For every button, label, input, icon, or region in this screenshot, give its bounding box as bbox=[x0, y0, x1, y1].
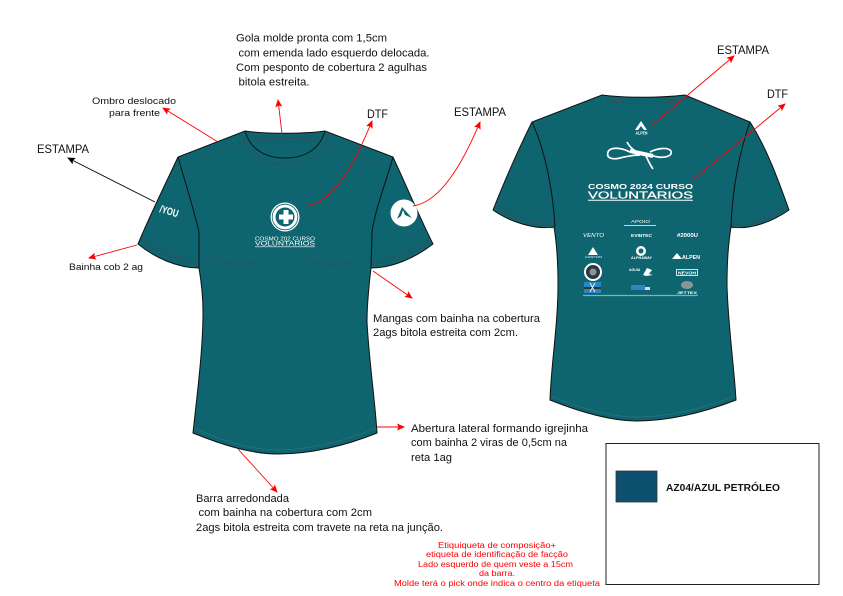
label: estampa left: ESTAMPA bbox=[37, 144, 89, 156]
back title: VOLUNTARIOS bbox=[588, 190, 693, 202]
label: gola: bitola estreita. bbox=[238, 76, 310, 88]
front t-shirt bbox=[138, 131, 433, 454]
label: DTF back: DTF bbox=[767, 89, 788, 101]
chest text: VOLUNTARIOS bbox=[255, 242, 315, 248]
label: barra: com bainha na cobertura com 2cm bbox=[198, 507, 372, 519]
red note: da barra. bbox=[479, 569, 515, 578]
label: estampa back: ESTAMPA bbox=[717, 45, 769, 57]
chest text bbox=[255, 236, 315, 248]
red note bbox=[394, 541, 601, 588]
red note: Lado esquerdo de quem veste a 15cm bbox=[418, 560, 573, 569]
back neck logo bbox=[635, 121, 648, 136]
label: gola: Gola molde pronta com 1,5cm bbox=[236, 32, 387, 44]
label: estampa sleeve: ESTAMPA bbox=[454, 107, 506, 119]
back neck logo: ALPEN bbox=[636, 130, 648, 136]
back seams bbox=[496, 100, 787, 417]
chest text: COSMO 202 CURSO bbox=[255, 236, 315, 242]
sponsors: APOIO bbox=[631, 219, 651, 224]
label: barra: 2ags bitola estreita com travete na reta na junção. bbox=[196, 522, 443, 534]
sponsors: JETTEX bbox=[677, 291, 698, 295]
sponsors bbox=[583, 219, 700, 296]
knot illustration bbox=[608, 142, 671, 169]
red note: Molde terá o pick onde indica o centro da etiqueta bbox=[394, 579, 601, 588]
colour legend box bbox=[606, 444, 819, 584]
label: abertura lateral: com bainha 2 viras de 0,5cm na bbox=[411, 437, 568, 449]
colour name: AZ04/AZUL PETRÓLEO bbox=[666, 481, 780, 494]
sponsors: NEVOH bbox=[678, 270, 696, 276]
sponsors: #2000U bbox=[677, 233, 698, 239]
back title: COSMO 2024 CURSO bbox=[588, 184, 694, 191]
sponsors: AGUIA bbox=[629, 268, 641, 272]
label: abertura lateral: Abertura lateral formando igrejinha bbox=[411, 423, 589, 435]
sponsors: ALPHAWAY bbox=[631, 256, 653, 260]
sponsors: VENTO bbox=[583, 233, 604, 239]
sponsors: ALPEN bbox=[682, 255, 700, 261]
annotation arrows bbox=[68, 56, 785, 492]
label: gola: Com pesponto de cobertura 2 agulhas bbox=[236, 62, 428, 74]
right sleeve patch bbox=[390, 200, 418, 226]
left sleeve print: /YOU bbox=[158, 203, 180, 220]
label: abertura lateral: reta 1ag bbox=[411, 452, 452, 464]
sponsors: EVINTEC bbox=[631, 233, 653, 238]
front seams bbox=[141, 131, 431, 450]
label: mangas: Mangas com bainha na cobertura bbox=[373, 313, 541, 325]
back title bbox=[588, 184, 694, 202]
label: barra: Barra arredondada bbox=[196, 493, 290, 505]
label: gola: com emenda lado esquerdo delocada. bbox=[238, 48, 430, 60]
back t-shirt bbox=[493, 95, 789, 421]
back shirt body bbox=[493, 95, 789, 421]
label: gola bbox=[236, 32, 430, 88]
sponsors: CANYON bbox=[585, 255, 602, 259]
label: ombro: Ombro deslocado bbox=[92, 96, 176, 106]
label: mangas: 2ags bitola estreita com 2cm. bbox=[373, 327, 518, 339]
label: abertura lateral bbox=[411, 423, 589, 464]
chest logo bbox=[270, 202, 300, 232]
label: barra bbox=[196, 493, 443, 534]
colour swatch bbox=[616, 471, 657, 502]
label: ombro: para frente bbox=[109, 108, 160, 118]
label: bainha: Bainha cob 2 ag bbox=[69, 262, 143, 272]
front shirt body bbox=[138, 131, 433, 454]
red note: etiqueta de identificação de facção bbox=[426, 550, 569, 559]
label: ombro bbox=[92, 96, 176, 118]
label: DTF front: DTF bbox=[367, 109, 388, 121]
label: mangas bbox=[373, 313, 541, 339]
red note: Etiquiqueta de composição+ bbox=[438, 541, 556, 550]
